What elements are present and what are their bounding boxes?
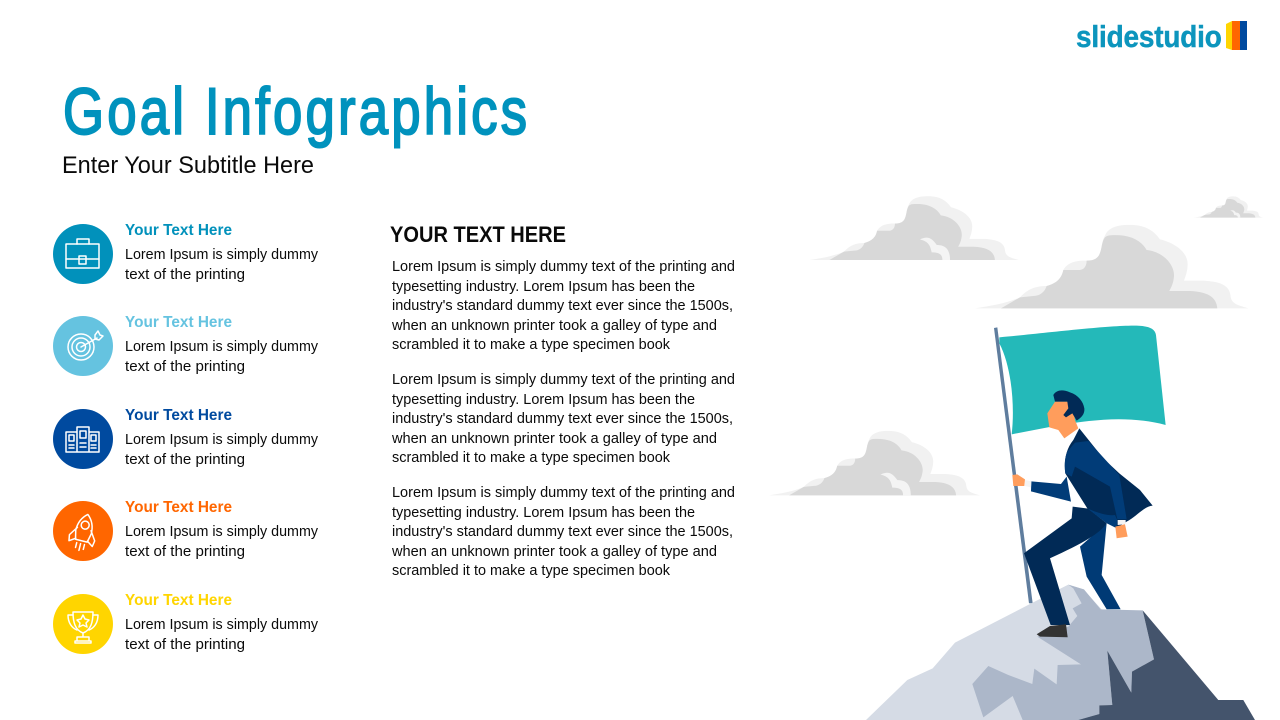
item text [125, 499, 318, 560]
paragraph 3 [391, 485, 735, 579]
cloud: small top right [1193, 196, 1263, 218]
paragraph 2: typesetting industry. Lorem Ipsum has been the [392, 392, 695, 408]
list item: buildings [53, 407, 318, 469]
cloud: upper middle [810, 196, 1019, 260]
item text [125, 407, 318, 468]
paragraph 1: Lorem Ipsum is simply dummy text of the printing and [392, 259, 735, 275]
item text: text of the printing [125, 266, 245, 283]
flag pole [994, 327, 1033, 603]
paragraph 2 [391, 372, 735, 466]
list item: rocket [53, 499, 318, 561]
paragraph 3: Lorem Ipsum is simply dummy text of the printing and [392, 485, 735, 501]
item text [125, 592, 318, 653]
cloud: large right [975, 225, 1248, 308]
paragraph 1: industry's standard dummy text ever since the 1500s, [392, 298, 733, 314]
title: Goal Infographics [63, 74, 527, 148]
item text: text of the printing [125, 358, 245, 375]
flag [999, 326, 1166, 434]
icon: briefcase [53, 224, 113, 284]
paragraph 2: Lorem Ipsum is simply dummy text of the printing and [392, 372, 735, 388]
paragraph 3: when an unknown printer took a galley of type and [391, 544, 717, 560]
item text: Lorem Ipsum is simply dummy [125, 338, 318, 355]
item text [125, 314, 318, 375]
item text [125, 222, 318, 283]
item text: Lorem Ipsum is simply dummy [125, 523, 318, 540]
list item: briefcase [53, 222, 318, 284]
man holding flag [1012, 390, 1153, 637]
item text: text of the printing [125, 451, 245, 468]
item text: text of the printing [125, 543, 245, 560]
icon: rocket [53, 501, 113, 561]
item text: Your Text Here [125, 499, 232, 516]
paragraph 2: scrambled it to make a type specimen book [392, 450, 671, 466]
item text: Lorem Ipsum is simply dummy [125, 431, 318, 448]
paragraph 3: industry's standard dummy text ever since the 1500s, [392, 524, 733, 540]
mountain [866, 585, 1255, 720]
item text: Your Text Here [125, 592, 232, 609]
subtitle: Enter Your Subtitle Here [62, 152, 314, 179]
list item: trophy [53, 592, 318, 654]
icon: target [53, 316, 113, 376]
paragraph 2: industry's standard dummy text ever since the 1500s, [392, 411, 733, 427]
item text: text of the printing [125, 636, 245, 653]
paragraph 3: scrambled it to make a type specimen book [392, 563, 671, 579]
icon: trophy [53, 594, 113, 654]
item text: Your Text Here [125, 222, 232, 239]
list item: target [53, 314, 318, 376]
item text: Your Text Here [125, 407, 232, 424]
item text: Your Text Here [125, 314, 232, 331]
icon: buildings [53, 409, 113, 469]
paragraph 1: scrambled it to make a type specimen book [392, 337, 671, 353]
heading: your text here: YOUR TEXT HERE [390, 222, 566, 247]
paragraph 1: when an unknown printer took a galley of type and [391, 318, 717, 334]
paragraph 1: typesetting industry. Lorem Ipsum has been the [392, 279, 695, 295]
cloud: lower left [769, 431, 980, 495]
paragraph 1 [391, 259, 735, 353]
item text: Lorem Ipsum is simply dummy [125, 246, 318, 263]
item text: Lorem Ipsum is simply dummy [125, 616, 318, 633]
logo: slidestudio: slidestudio [1076, 20, 1222, 54]
paragraph 2: when an unknown printer took a galley of type and [391, 431, 717, 447]
paragraph 3: typesetting industry. Lorem Ipsum has been the [392, 505, 695, 521]
